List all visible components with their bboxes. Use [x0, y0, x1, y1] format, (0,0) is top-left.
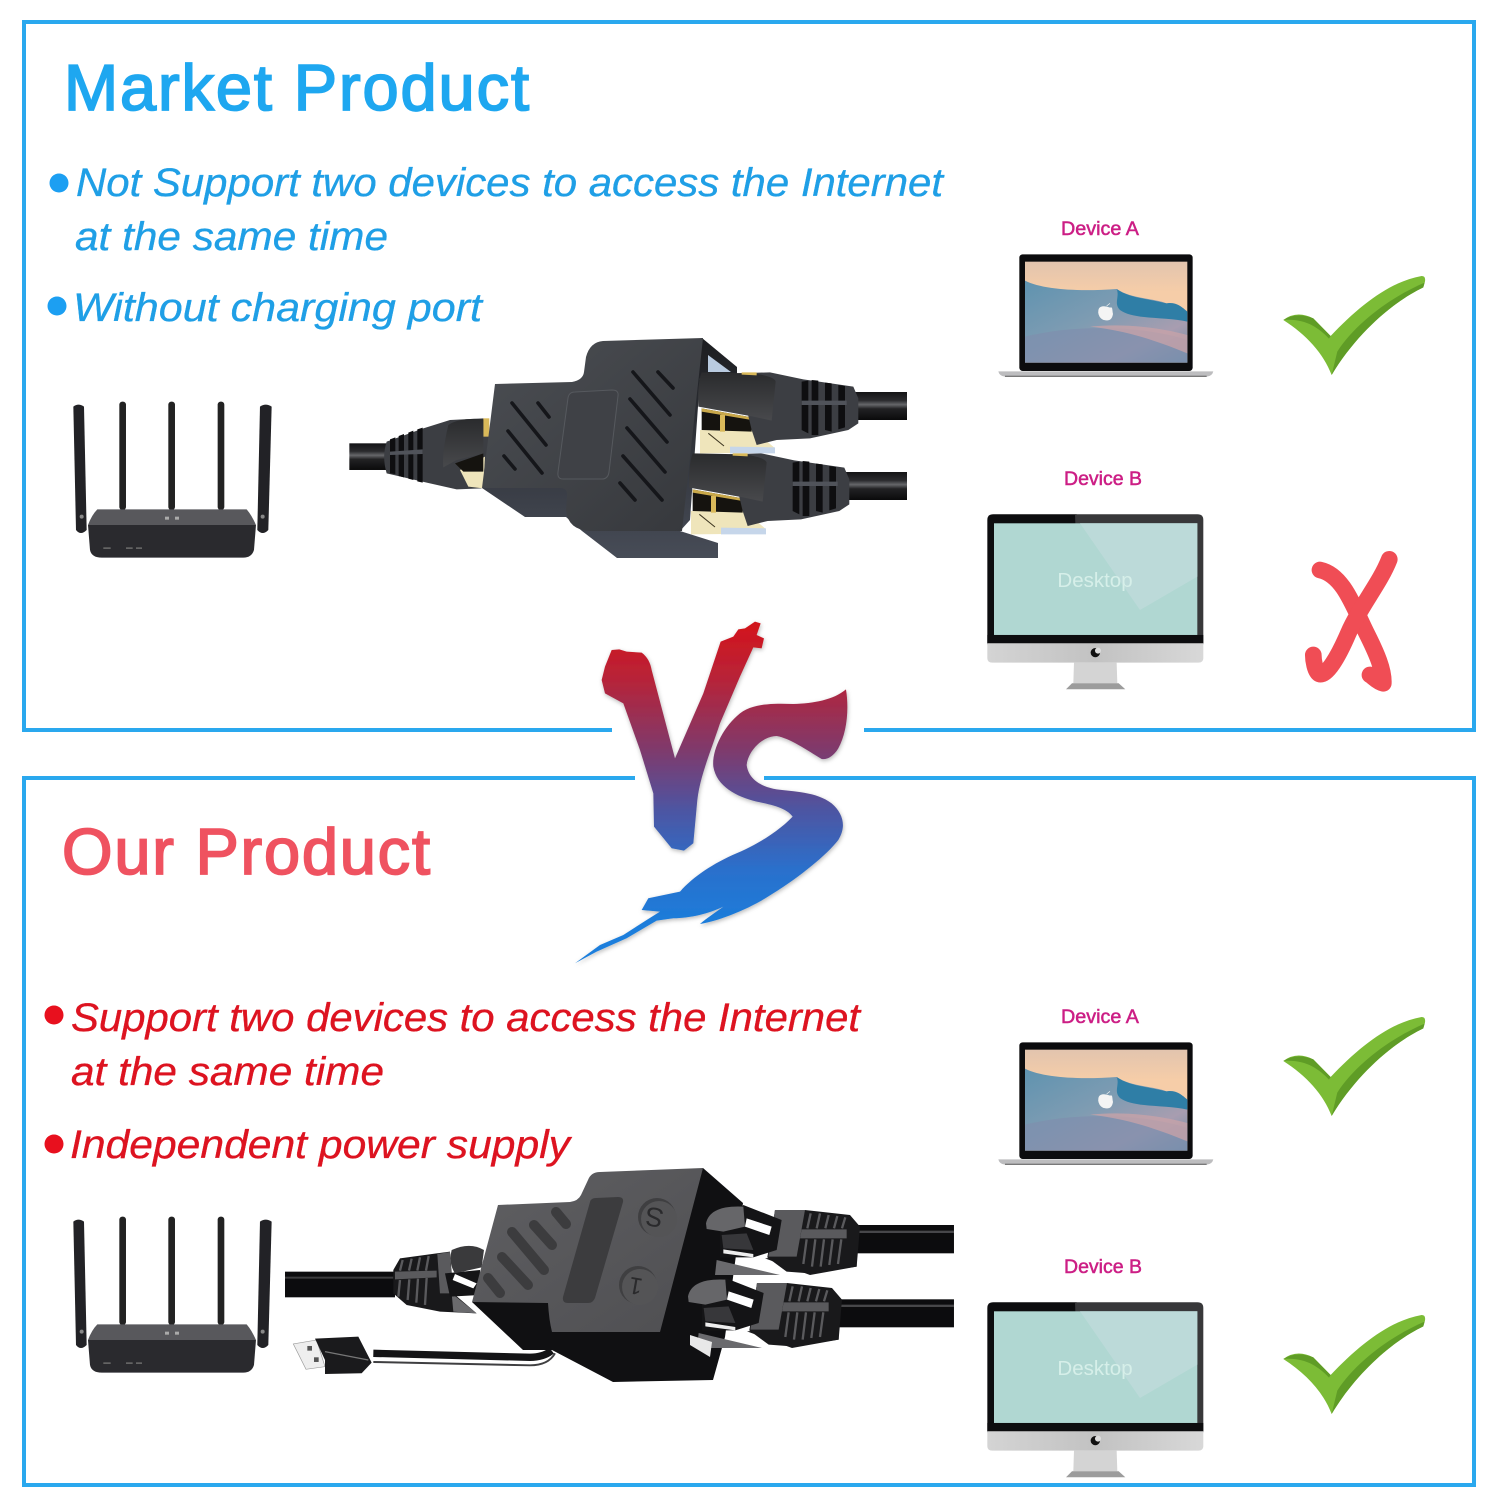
heading: market product: Market Product	[64, 51, 529, 124]
connector body: S	[643, 1201, 666, 1233]
icon: laptop	[998, 1042, 1213, 1165]
port window	[690, 1335, 712, 1357]
connector body: 1	[627, 1271, 645, 1300]
icon: desktop	[987, 514, 1203, 689]
upper right cable	[847, 1225, 954, 1253]
icon: router top	[73, 402, 272, 558]
usb cable and plug	[293, 1337, 555, 1374]
panel: our product	[24, 778, 1474, 1485]
icon: desktop: Desktop	[1057, 1357, 1133, 1380]
connector side faces	[482, 338, 737, 558]
letter s	[575, 689, 847, 963]
lower right cable	[828, 1299, 954, 1327]
device b label: Device B	[1064, 1257, 1142, 1278]
icon: router bottom	[73, 1217, 272, 1373]
heading: our product: Our Product	[62, 815, 430, 888]
icon: check mark a	[1283, 1017, 1425, 1116]
product: market splitter with cables	[349, 338, 907, 558]
device a label: Device A	[1061, 219, 1139, 240]
icon: desktop	[987, 1302, 1203, 1477]
product: our splitter with cables	[285, 1168, 954, 1382]
lower right plug	[689, 453, 849, 534]
text: no charging port: Without charging port	[73, 286, 484, 330]
connector body	[472, 1168, 703, 1332]
upper right cable	[848, 392, 907, 420]
connector body	[482, 338, 703, 531]
bullet list: market product	[48, 161, 945, 330]
icon: desktop: Desktop	[1057, 569, 1133, 592]
connector side faces	[472, 1168, 743, 1382]
lower right cable	[842, 472, 907, 500]
icon: check mark b	[1283, 1315, 1425, 1414]
text: same time: at the same time	[71, 1050, 384, 1094]
text: independent power: Independent power supply	[70, 1123, 573, 1167]
left cable and plug	[349, 418, 490, 489]
device a label: Device A	[1061, 1007, 1139, 1028]
upper right plug	[706, 1205, 860, 1275]
lower right plug	[688, 1278, 842, 1348]
icon: red cross	[1313, 559, 1389, 683]
text: dual device support: Support two devices to access the Internet	[71, 996, 862, 1040]
panel: market product	[24, 22, 1474, 730]
bullet 1	[44, 1006, 64, 1024]
bullet 2	[48, 296, 66, 316]
bullet 2	[44, 1134, 64, 1154]
icon: check mark	[1283, 276, 1425, 375]
bullet list: our product	[44, 996, 862, 1167]
left cable and plug	[285, 1246, 484, 1313]
letter v	[602, 622, 764, 851]
text: same time: at the same time	[75, 215, 388, 259]
vs emblem	[575, 622, 847, 963]
text: no dual device support: Not Support two devices to access the Internet	[76, 161, 945, 205]
device b label: Device B	[1064, 469, 1142, 490]
upper right plug	[698, 372, 858, 453]
bullet 1	[50, 174, 68, 192]
icon: laptop	[998, 254, 1213, 377]
